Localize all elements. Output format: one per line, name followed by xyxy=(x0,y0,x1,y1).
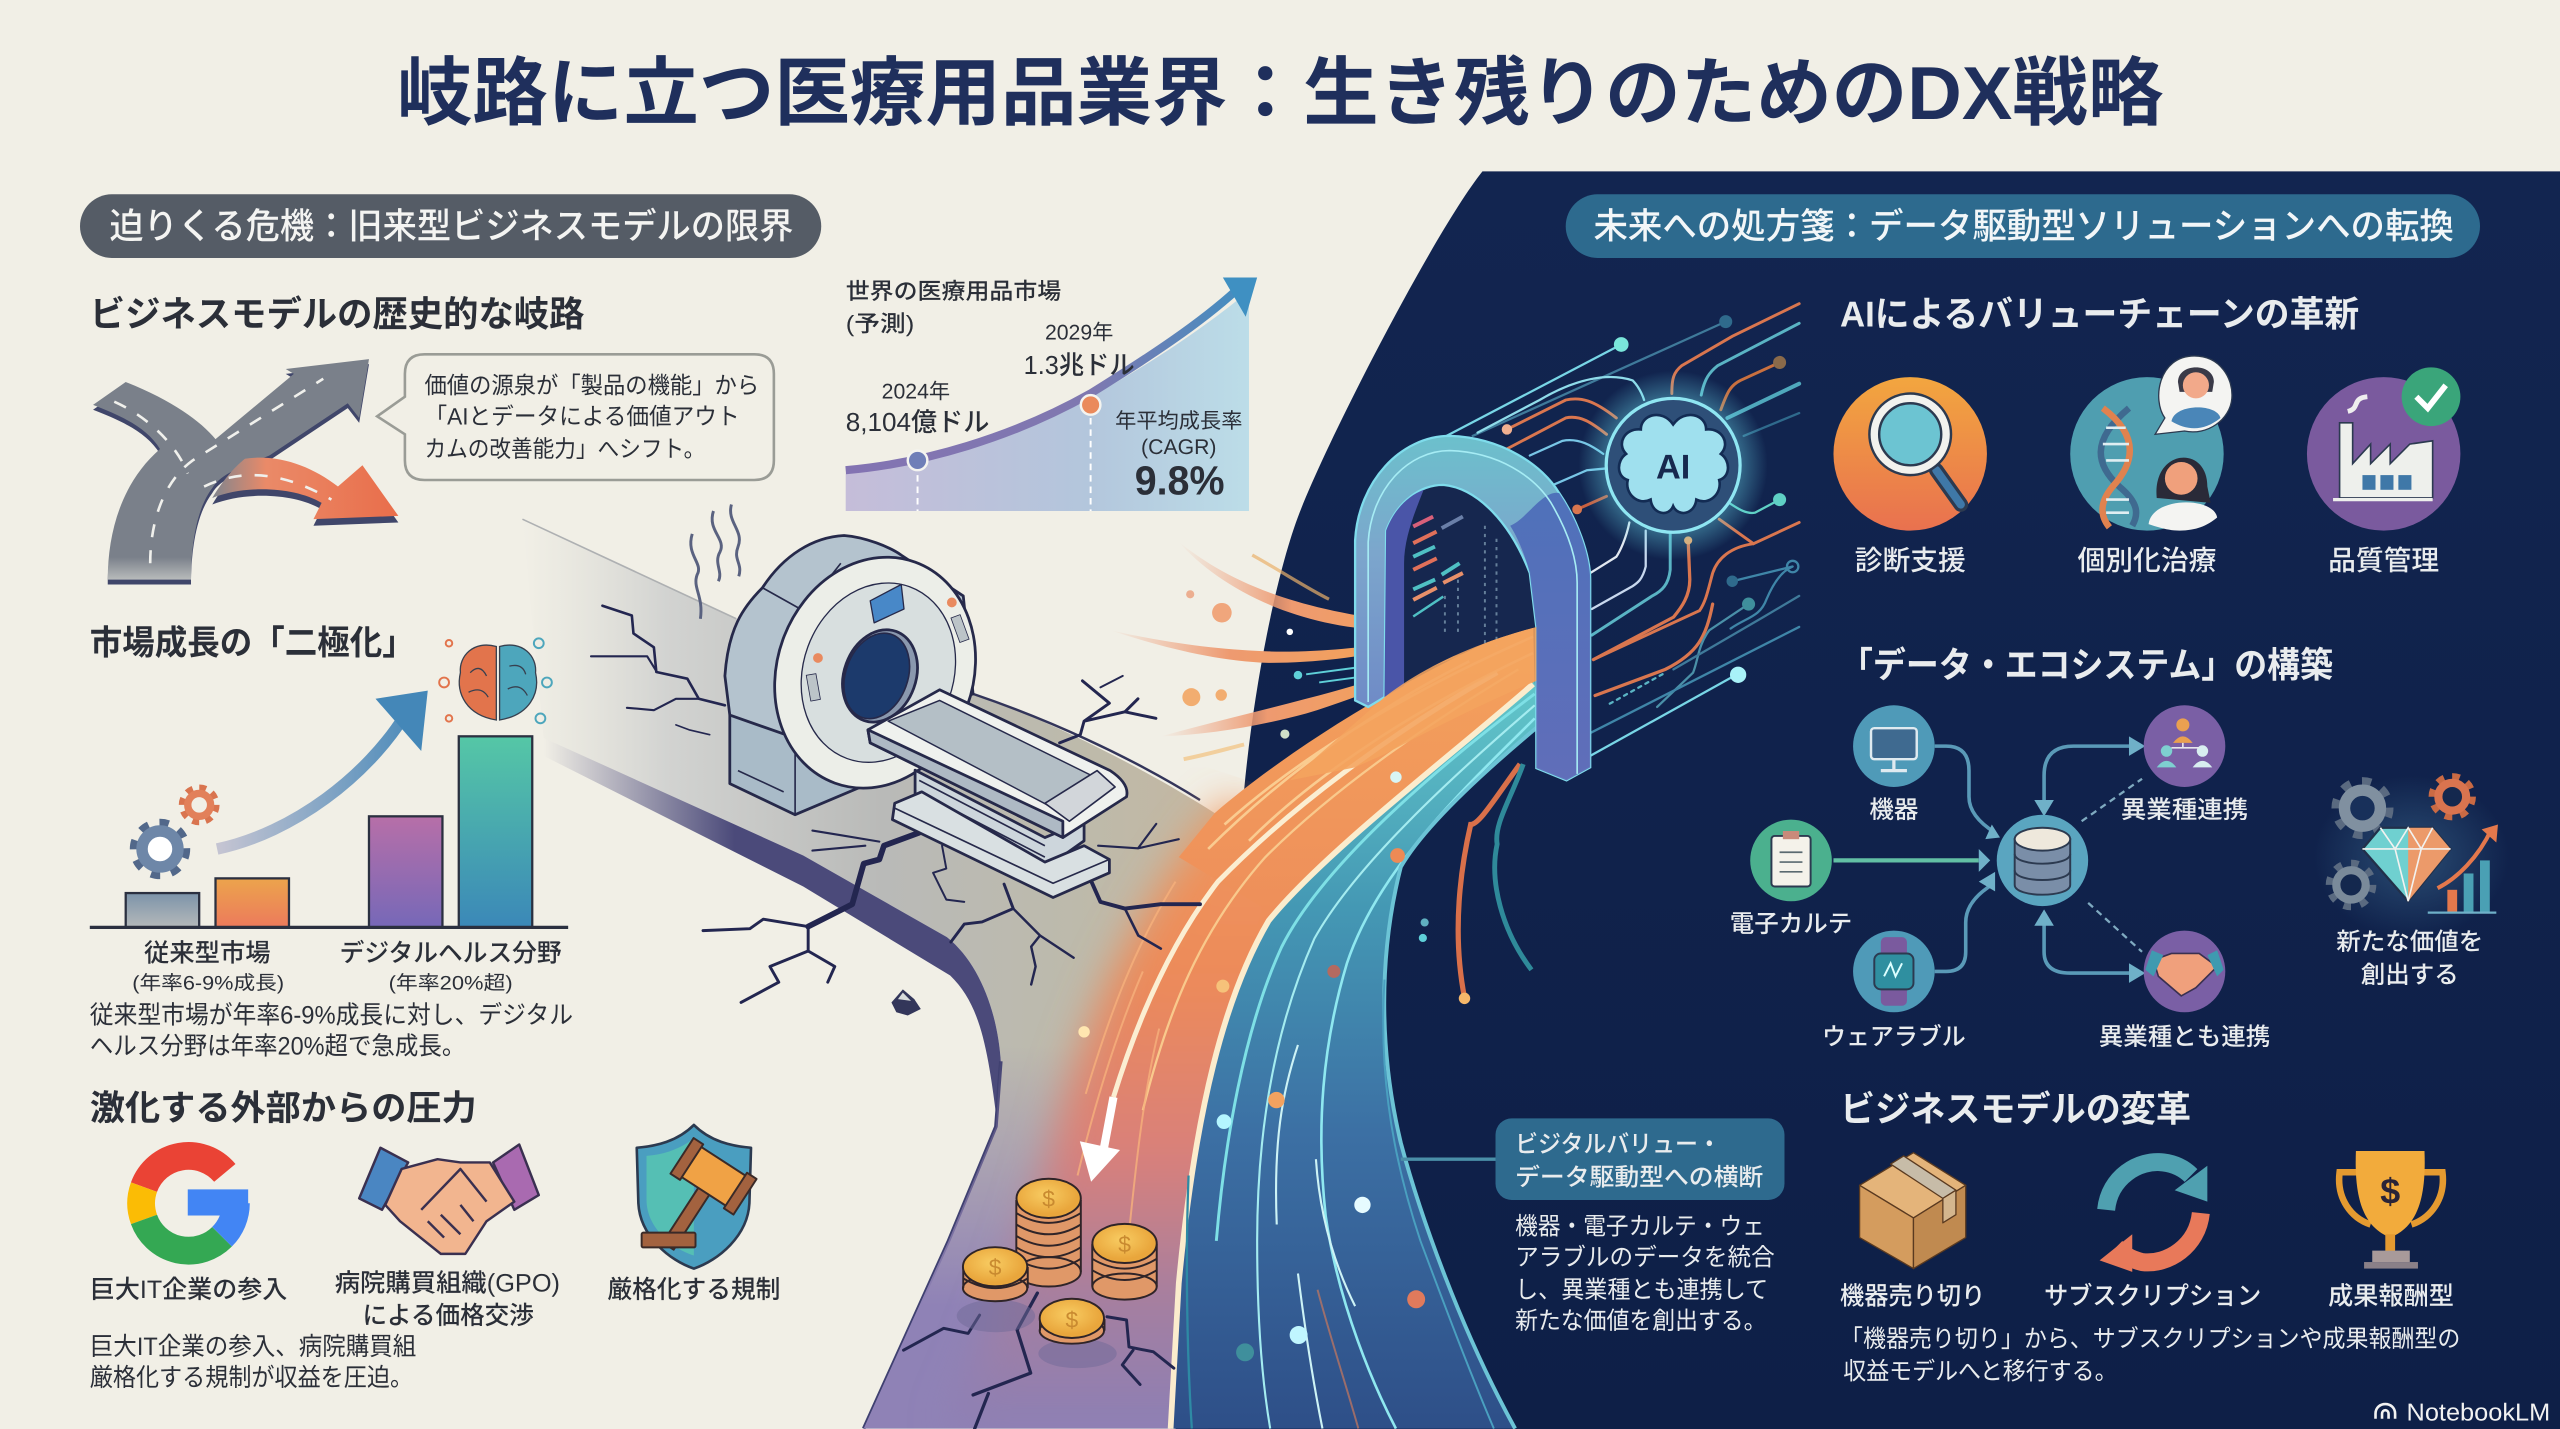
labels: pressure items: 巨大IT企業の参入 xyxy=(90,1275,288,1304)
chart: global market forecast: 2024年 xyxy=(882,379,950,403)
bar chart: market growth: (年率20%超) xyxy=(389,971,513,994)
labels: ecosystem nodes: 異業種連携 xyxy=(2121,797,2248,824)
text: digital value body xyxy=(1515,1213,1775,1336)
icon: trophy: $ xyxy=(2380,1171,2400,1211)
icon: device xyxy=(1853,705,1935,787)
labels: AI value chain: 個別化治療 xyxy=(2078,545,2216,576)
chart: global market forecast: 2029年 xyxy=(1045,320,1113,344)
chart: global market forecast: 世界の医療用品市場 xyxy=(846,278,1061,304)
callout: value shift: 価値の源泉が「製品の機能」から xyxy=(424,372,759,400)
bar chart: market growth: (年率6-9%成長) xyxy=(132,971,284,994)
bar chart: market growth xyxy=(90,736,568,994)
illustration: coin stacks: $ xyxy=(1065,1306,1079,1332)
chart: global market forecast: (CAGR) xyxy=(1141,434,1217,459)
icon: regulation shield and gavel xyxy=(637,1125,757,1269)
chart: global market forecast xyxy=(846,278,1257,511)
icon: cross-industry network xyxy=(2144,705,2225,787)
icon: cardboard box xyxy=(1860,1153,1966,1269)
icon: trophy xyxy=(2339,1151,2443,1269)
text: digital value body: アラブルのデータを統合 xyxy=(1515,1244,1775,1272)
heading: business model transformation: ビジネスモデルの変革 xyxy=(1840,1089,2191,1130)
text: business model body xyxy=(1840,1326,2460,1386)
callout: value shift: 「AIとデータによる価値アウト xyxy=(424,403,740,431)
icon: subscription cycle xyxy=(2100,1162,2207,1272)
labels: business models: 機器売り切り xyxy=(1840,1282,1985,1311)
text: digital value body: し、異業種とも連携して xyxy=(1515,1277,1768,1304)
panel header: prescription xyxy=(1566,194,2480,258)
text: digital value body: 機器・電子カルテ・ウェ xyxy=(1515,1213,1765,1241)
labels: ecosystem nodes: 機器 xyxy=(1869,797,1918,824)
panel header: prescription: 未来への処方箋：データ駆動型ソリューションへの転換 xyxy=(1593,206,2454,247)
panel header: crisis: 迫りくる危機：旧来型ビジネスモデルの限界 xyxy=(109,206,793,247)
illustration: AI brain node xyxy=(1578,371,1768,560)
text: pressure body: 巨大IT企業の参入、病院購買組 xyxy=(90,1332,416,1362)
labels: pressure items xyxy=(90,1269,780,1331)
labels: AI value chain xyxy=(1855,545,2439,576)
icon: big tech G xyxy=(141,1156,248,1251)
text: business model body: 収益モデルへと移行する。 xyxy=(1843,1358,2118,1386)
icon: quality control xyxy=(2307,367,2460,531)
illustration: cracks in road xyxy=(591,606,1200,1429)
label: create new value: 創出する xyxy=(2361,962,2459,989)
icon: growth arrow xyxy=(217,691,428,849)
labels: pressure items: 厳格化する規制 xyxy=(607,1275,780,1304)
icon: forked road arrows xyxy=(93,359,398,584)
labels: ecosystem nodes: 電子カルテ xyxy=(1730,911,1852,939)
illustration: small rock xyxy=(891,989,921,1016)
text: business model body: 「機器売り切り」から、サブスクリプションや成果報酬型の xyxy=(1840,1326,2460,1353)
heading: AI value chain: AIによるバリューチェーンの革新 xyxy=(1840,294,2359,335)
callout: digital value xyxy=(1401,1118,1784,1200)
text: polarization body: ヘルス分野は年率20%超で急成長。 xyxy=(90,1032,465,1061)
icon: data hub xyxy=(1997,815,2088,906)
panel: dark future background xyxy=(1176,171,2560,1429)
icon: diagnosis support xyxy=(1833,377,1987,531)
labels: AI value chain: 品質管理 xyxy=(2328,545,2439,576)
illustration: coin stacks: $ xyxy=(989,1254,1002,1280)
labels: business models: 成果報酬型 xyxy=(2328,1282,2454,1311)
labels: ecosystem nodes: 異業種とも連携 xyxy=(2099,1024,2270,1051)
label: create new value: 新たな価値を xyxy=(2336,929,2483,957)
illustration: AI brain node: AI xyxy=(1656,449,1690,487)
labels: ecosystem nodes: ウェアラブル xyxy=(1822,1024,1966,1051)
illustration: data flow stream xyxy=(849,622,1538,1429)
labels: pressure items: による価格交渉 xyxy=(362,1301,535,1331)
text: polarization body: 従来型市場が年率6-9%成長に対し、デジタル xyxy=(90,1001,573,1030)
chart: global market forecast: 年平均成長率 xyxy=(1115,408,1242,433)
callout: digital value: ビジタルバリュー・ xyxy=(1515,1131,1721,1159)
callout: value shift: カムの改善能力」へシフト。 xyxy=(424,436,705,464)
bar chart: market growth: 従来型市場 xyxy=(144,939,271,968)
diagram: data ecosystem xyxy=(1730,705,2270,1051)
labels: pressure items: 病院購買組織(GPO) xyxy=(335,1269,560,1298)
chart: global market forecast: (予測) xyxy=(846,310,914,336)
watermark: NotebookLM: NotebookLM xyxy=(2407,1399,2550,1427)
text: digital value body: 新たな価値を創出する。 xyxy=(1515,1308,1767,1336)
chart: global market forecast: 9.8% xyxy=(1135,459,1224,504)
panel header: crisis xyxy=(80,194,821,258)
illustration: heat waves above scanner xyxy=(691,504,740,619)
labels: ecosystem nodes xyxy=(1730,797,2270,1051)
illustration: orange streaks entering tunnel xyxy=(1110,542,1502,759)
title: 岐路に立つ医療用品業界：生き残りのためのDX戦略 xyxy=(397,51,2163,136)
illustration: coin stacks xyxy=(957,1179,1157,1368)
label: create new value xyxy=(2336,929,2483,989)
chart: global market forecast: 1.3兆ドル xyxy=(1024,351,1135,380)
illustration: coin stacks: $ xyxy=(1118,1231,1131,1257)
heading: historic fork: ビジネスモデルの歴史的な岐路 xyxy=(90,294,584,335)
icon: gears xyxy=(135,789,216,874)
heading: external pressure: 激化する外部からの圧力 xyxy=(90,1089,477,1128)
callout: digital value: データ駆動型への横断 xyxy=(1515,1164,1763,1192)
icon: brain xyxy=(439,638,552,723)
text: pressure body xyxy=(90,1332,416,1393)
callout: value shift xyxy=(377,354,774,480)
chart: global market forecast: 8,104億ドル xyxy=(846,408,989,438)
icon: medical record xyxy=(1750,820,1832,901)
heading: polarization: 市場成長の「二極化」 xyxy=(90,624,415,663)
icon: handshake partnership xyxy=(2144,931,2225,1012)
text: pressure body: 厳格化する規制が収益を圧迫。 xyxy=(90,1363,413,1393)
illustration: coin stacks: $ xyxy=(1042,1185,1055,1211)
labels: business models xyxy=(1840,1282,2454,1311)
illustration: falling arrow xyxy=(1080,1141,1120,1182)
text: polarization body xyxy=(90,1001,573,1061)
icon: new value diamond and gears xyxy=(2313,776,2509,939)
soft orange blend over road xyxy=(864,780,1272,1429)
labels: business models: サブスクリプション xyxy=(2044,1282,2261,1311)
illustration: digital tunnel arch xyxy=(1355,436,1590,780)
heading: data ecosystem: 「データ・エコシステム」の構築 xyxy=(1840,645,2333,686)
arrows: connections xyxy=(1833,736,2145,983)
illustration: cracked old road xyxy=(522,519,1215,1429)
icon: wearable xyxy=(1853,931,1935,1012)
bar chart: market growth: デジタルヘルス分野 xyxy=(340,939,562,968)
illustration: stream re-entering arch xyxy=(1290,627,1536,780)
illustration: MRI scanner xyxy=(725,529,1127,897)
icon: handshake xyxy=(359,1144,539,1254)
illustration: AI circuit lines xyxy=(1447,304,1799,756)
icon: personalized medicine xyxy=(2070,356,2232,531)
labels: AI value chain: 診断支援 xyxy=(1855,545,1966,576)
